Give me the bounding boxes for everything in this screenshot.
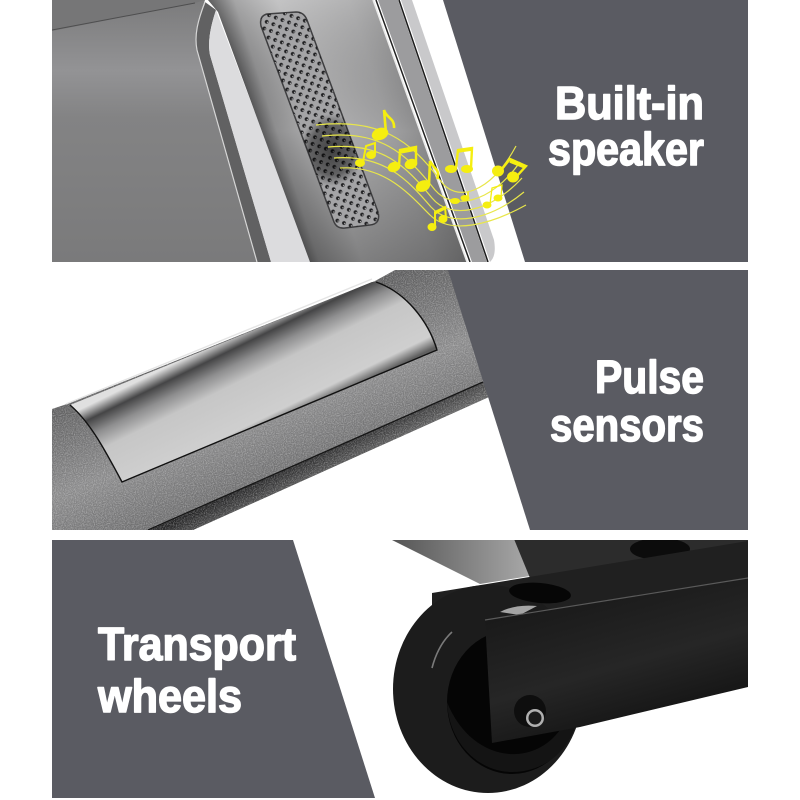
panel background: speaker label xyxy=(443,0,748,262)
heading: Transport wheels: wheels xyxy=(97,670,242,722)
heading: Pulse sensors xyxy=(550,351,704,451)
icon: hex bolt xyxy=(514,695,546,727)
heading: Transport wheels: Transport xyxy=(98,618,296,670)
heading: Pulse sensors: Pulse xyxy=(595,351,704,403)
icon: speaker grille xyxy=(260,11,380,229)
heading: Built-in speaker: Built-in xyxy=(555,77,704,129)
panel: pulse sensors xyxy=(52,270,748,530)
photo: transport wheel xyxy=(392,538,748,793)
heading: Pulse sensors: sensors xyxy=(550,399,704,451)
photo: console surface xyxy=(52,0,512,262)
panel: transport wheels xyxy=(52,538,748,798)
heading: Built-in speaker: speaker xyxy=(548,123,704,175)
panel: built-in speaker xyxy=(52,0,748,262)
photo: handlebar with sensor plate xyxy=(52,270,512,530)
panel background: pulse label xyxy=(448,270,748,530)
heading: Built-in speaker xyxy=(548,77,704,175)
panel background: wheels label xyxy=(52,540,375,798)
heading: Transport wheels xyxy=(97,618,296,722)
icon: music notes and staff xyxy=(316,110,526,230)
